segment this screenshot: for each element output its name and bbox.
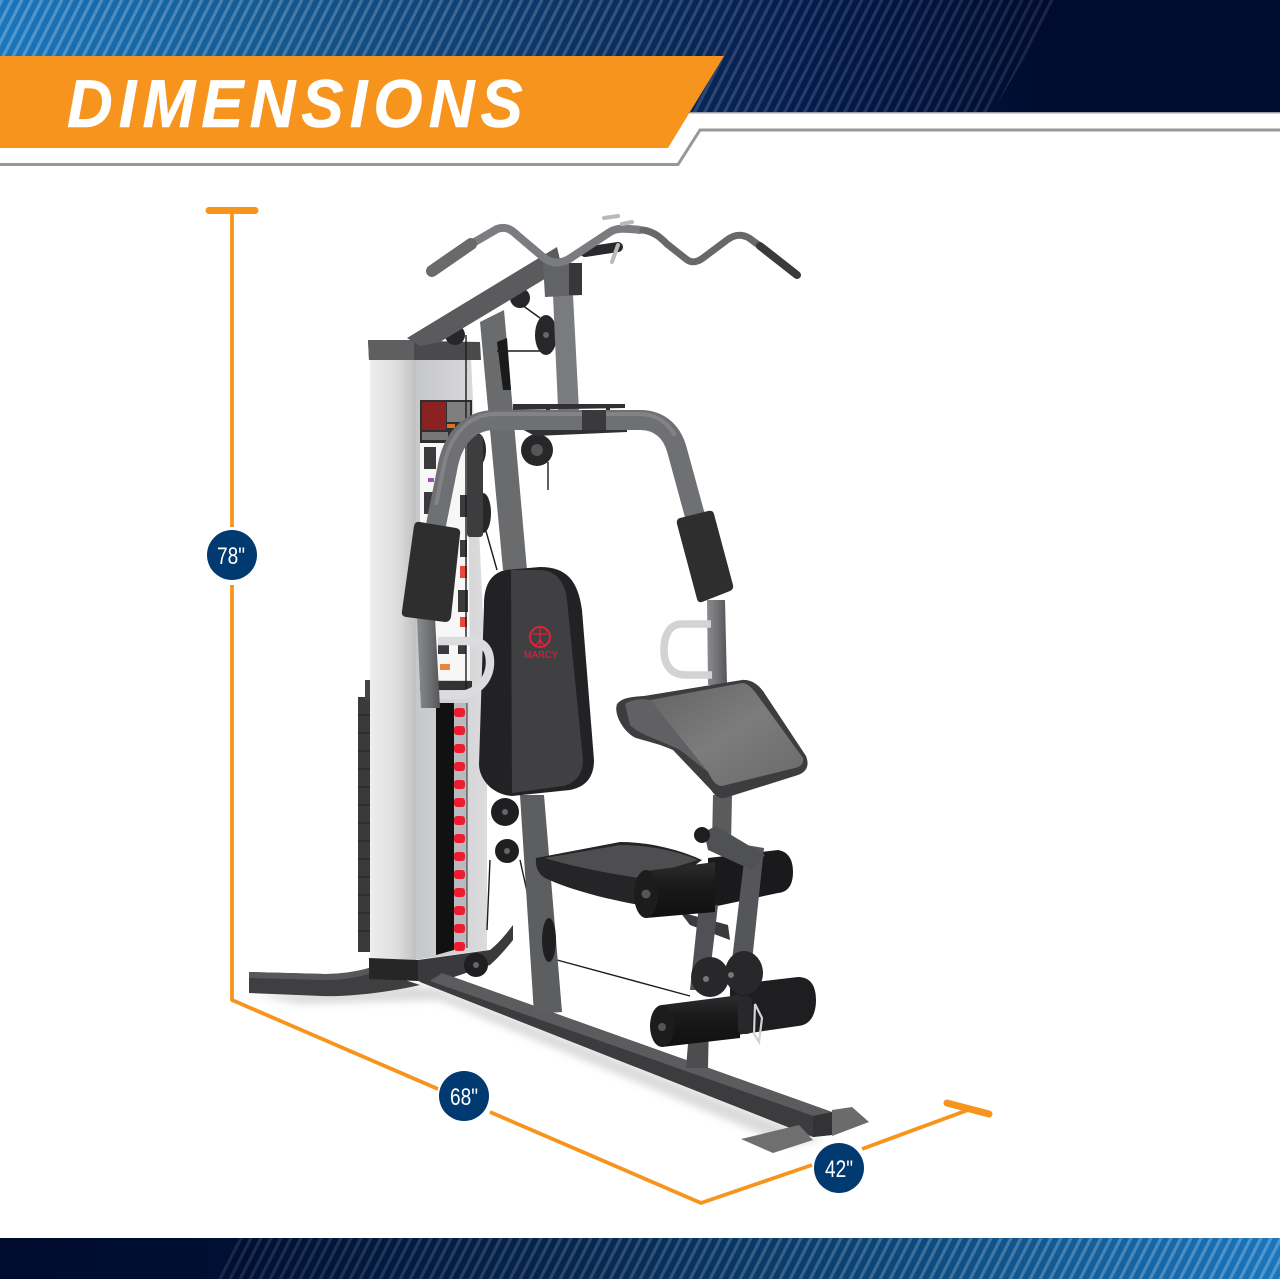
carabiner clip bbox=[754, 1004, 762, 1042]
title: DIMENSIONS bbox=[67, 66, 523, 141]
tower top cap bbox=[368, 340, 481, 360]
tower upright bbox=[480, 310, 527, 570]
title ribbon bbox=[0, 56, 724, 148]
floor shadow bbox=[255, 985, 822, 1146]
pec arm tube bbox=[436, 410, 695, 525]
left arm pad bbox=[402, 522, 460, 622]
seat bbox=[536, 842, 702, 905]
leg developer inner arm bbox=[690, 905, 718, 990]
central post bbox=[543, 263, 582, 430]
handle left bbox=[438, 641, 490, 695]
leg developer front arm bbox=[694, 826, 765, 990]
dimension lines bbox=[209, 210, 989, 1203]
exercise placard bbox=[420, 400, 472, 690]
length badge bbox=[439, 1071, 489, 1121]
length badge: 68" bbox=[450, 1084, 478, 1111]
upper cross pulleys bbox=[423, 288, 530, 345]
weight stack rear bbox=[358, 680, 371, 952]
lat bar bbox=[432, 216, 797, 275]
weight stack slot with red number tags bbox=[436, 703, 467, 955]
main floor beam bbox=[420, 973, 832, 1137]
width badge: 42" bbox=[825, 1156, 853, 1183]
header outline stroke bbox=[0, 130, 1280, 164]
home gym product illustration bbox=[249, 216, 869, 1153]
back rest bbox=[479, 567, 594, 796]
top and rear pulleys bbox=[467, 315, 557, 537]
lower seat post bbox=[520, 795, 562, 1014]
Marcy logo: MARCY bbox=[524, 650, 558, 661]
front floor plates bbox=[741, 1107, 869, 1153]
tower base block and feet bbox=[249, 925, 513, 996]
header banner bbox=[0, 0, 1280, 114]
width badge bbox=[814, 1143, 864, 1193]
tower front panel bbox=[370, 358, 416, 960]
rear lower roller bbox=[730, 977, 816, 1036]
tower side panel bbox=[414, 358, 487, 960]
right lower arm bbox=[707, 600, 727, 685]
preacher post bbox=[712, 795, 732, 845]
height badge bbox=[207, 530, 257, 580]
height badge: 78" bbox=[217, 543, 245, 570]
back pulleys bbox=[464, 798, 556, 977]
rear upper roller bbox=[708, 850, 793, 908]
front lower roller bbox=[650, 995, 740, 1047]
pivot plates bbox=[513, 404, 627, 436]
right arm pad bbox=[677, 511, 733, 602]
cables bbox=[466, 305, 690, 996]
front upper roller bbox=[634, 862, 715, 918]
leg developer pulleys bbox=[691, 951, 763, 1034]
handle right bbox=[664, 624, 712, 675]
seat support bbox=[680, 912, 730, 940]
upper cross beam bbox=[407, 247, 562, 346]
lower vertical post bbox=[686, 1020, 709, 1068]
preacher curl pad bbox=[616, 680, 808, 798]
left lower arm bbox=[417, 618, 440, 708]
footer band bbox=[0, 1238, 1280, 1280]
Marcy logo bbox=[524, 627, 558, 661]
